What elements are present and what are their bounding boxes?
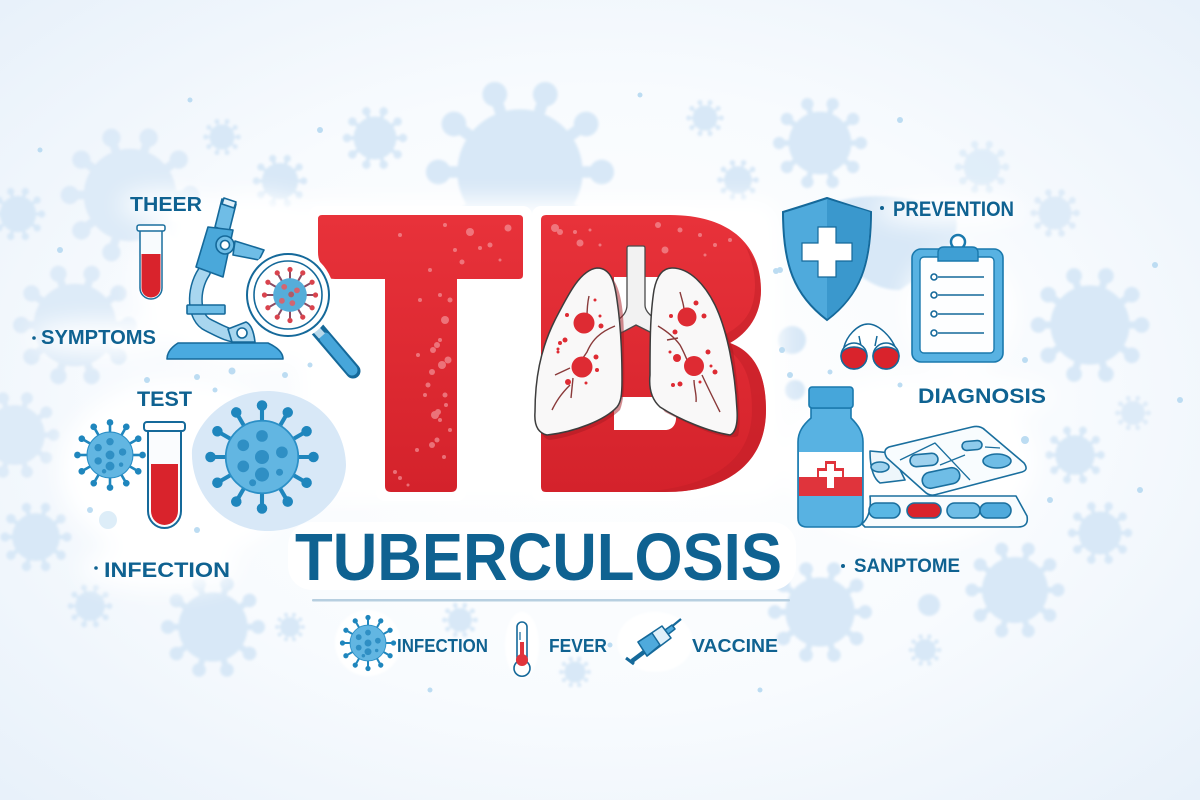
- label: SANPTOME: SANPTOME: [854, 556, 960, 577]
- splatter dots: [38, 92, 1183, 692]
- icon: microscope: [167, 198, 283, 359]
- background virus pattern: [0, 79, 1151, 688]
- icon: magnifying glass with virus: [242, 249, 353, 371]
- white outline of letters: [318, 215, 766, 492]
- label: THEER: THEER: [130, 194, 203, 216]
- icon: virus footer: [340, 615, 396, 671]
- icon: medicine bottle: [798, 387, 863, 527]
- back blister: [870, 451, 905, 483]
- icon: small test tube: [137, 225, 165, 299]
- label: PREVENTION: PREVENTION: [893, 198, 1014, 221]
- left lung: [535, 268, 622, 435]
- label: VACCINE: VACCINE: [692, 636, 778, 656]
- main title pill: [288, 522, 796, 590]
- letter T: [318, 215, 523, 492]
- lung shadow: [538, 272, 740, 440]
- label: INFECTION: INFECTION: [104, 559, 230, 582]
- icon: flasks: [841, 324, 899, 369]
- darker shading on B: [640, 343, 766, 492]
- white halo blobs: [30, 191, 1055, 590]
- footer halos: [335, 610, 693, 678]
- right lung: [650, 268, 737, 435]
- icon: virus large: [205, 400, 319, 514]
- icon: large test tube: [144, 422, 185, 528]
- bottom tray: [862, 496, 1027, 527]
- blob behind virus: [192, 391, 346, 531]
- label: INFECTION footer: INFECTION: [397, 636, 488, 656]
- white cross: [802, 227, 852, 277]
- icon: virus small: [74, 419, 146, 491]
- trachea: [618, 246, 655, 333]
- label: FEVER: FEVER: [549, 636, 607, 656]
- label: DIAGNOSIS: DIAGNOSIS: [918, 385, 1046, 408]
- title letters: TB: [318, 215, 766, 492]
- letter B: [541, 215, 766, 492]
- icon: clipboard: [912, 235, 1003, 362]
- label: SYMPTOMS: SYMPTOMS: [41, 327, 156, 349]
- title: TUBERCULOSIS: TUBERCULOSIS: [295, 520, 782, 595]
- icon: thermometer: [514, 622, 530, 676]
- icon: lungs: [535, 268, 740, 440]
- icon: pill blister packs: [862, 426, 1027, 527]
- icon: shield: [783, 198, 871, 320]
- divider line: [312, 599, 790, 602]
- tilted blister: [885, 426, 1026, 495]
- label: TEST: TEST: [137, 388, 192, 411]
- icon: syringe: [626, 619, 681, 664]
- red texture specks: [393, 222, 732, 486]
